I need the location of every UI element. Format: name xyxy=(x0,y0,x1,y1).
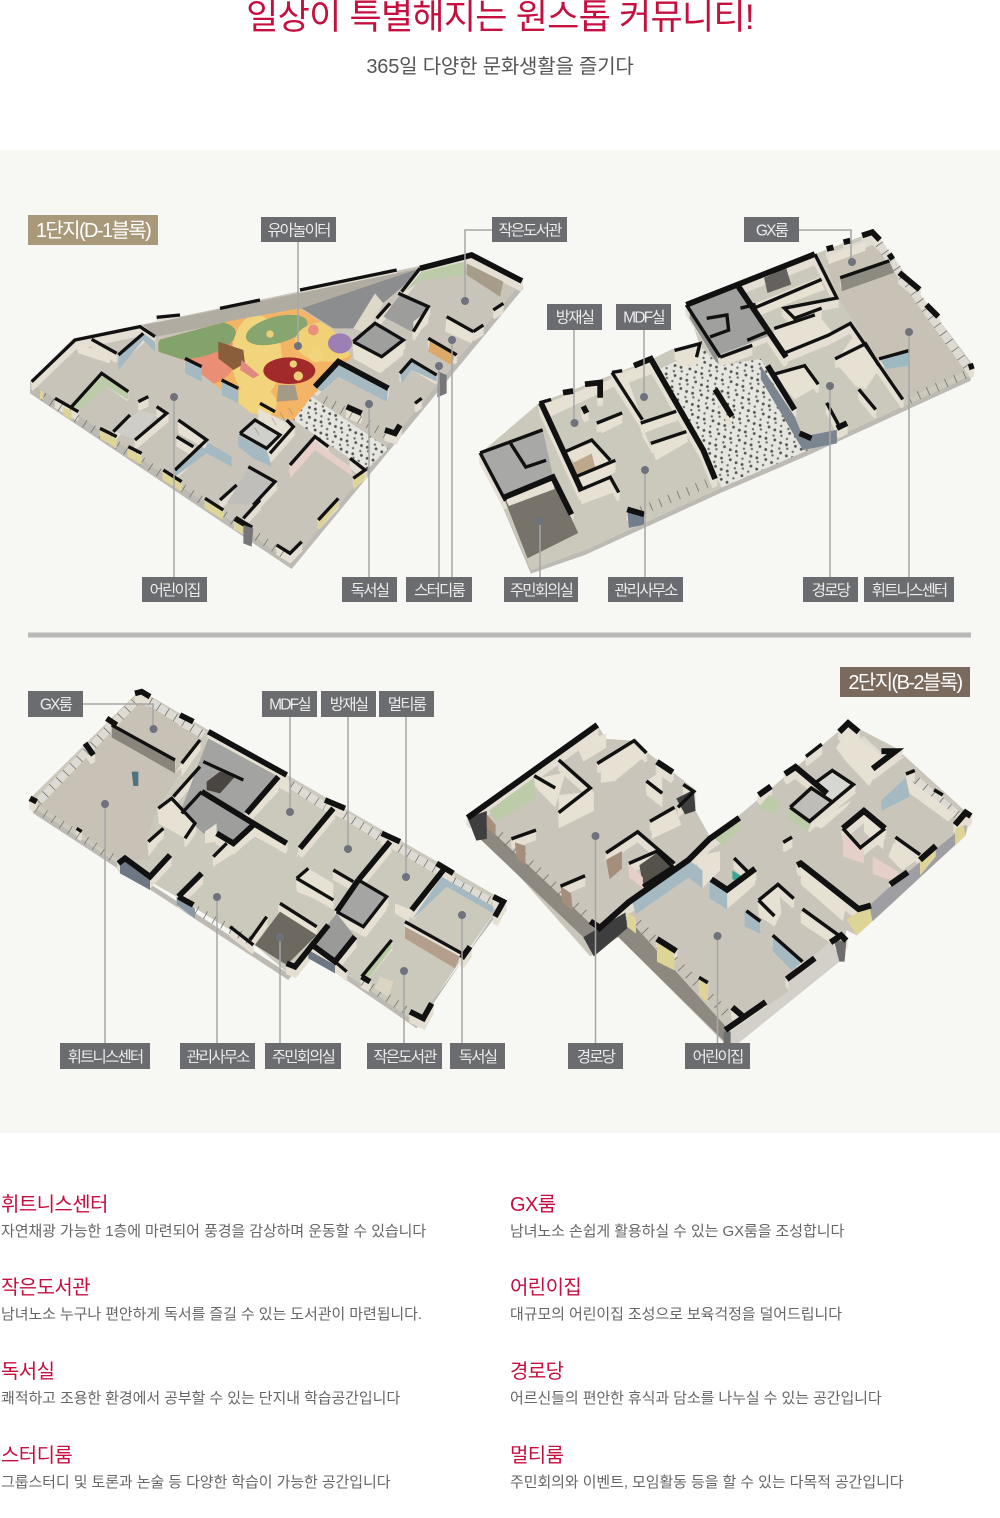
callout: 관리사무소 (2단지): 관리사무소 xyxy=(186,1048,250,1066)
text block: 작은도서관 xyxy=(1,1276,422,1323)
playground xyxy=(154,307,358,422)
black walls xyxy=(480,232,974,514)
callout: 어린이집 (2단지) xyxy=(685,932,750,1069)
text block: 멀티룸 xyxy=(510,1444,904,1491)
stone wall xyxy=(143,268,420,337)
tag: complex 1: 1단지(D-1블록) xyxy=(36,219,151,242)
mechanical rooms xyxy=(686,285,771,356)
meeting room xyxy=(504,477,578,558)
callout: MDF실 (2단지): MDF실 xyxy=(269,696,310,714)
tag: complex 2: 2단지(B-2블록) xyxy=(848,671,963,694)
text block: GX룸 xyxy=(510,1194,844,1240)
tag: complex 1 xyxy=(28,215,158,245)
callout: 방재실 (2단지): 방재실 xyxy=(330,696,368,714)
callout: GX룸 xyxy=(744,217,856,266)
callout: 어린이집 xyxy=(142,393,207,602)
text block: 스터디룸: 그룹스터디 및 토론과 논술 등 다양한 학습이 가능한 공간입니다 xyxy=(1,1474,390,1491)
text block: 독서실: 쾌적하고 조용한 환경에서 공부할 수 있는 단지내 학습공간입니다 xyxy=(1,1390,400,1407)
callout: 작은도서관: 작은도서관 xyxy=(498,222,562,240)
callout: 독서실 (2단지) xyxy=(450,911,505,1069)
text block: GX룸: 남녀노소 손쉽게 활용하실 수 있는 GX룸을 조성합니다 xyxy=(510,1223,844,1240)
text block: 멀티룸: 멀티룸 xyxy=(510,1444,563,1466)
callout: 작은도서관 (2단지) xyxy=(367,967,442,1069)
text block: 작은도서관: 작은도서관 xyxy=(1,1276,90,1298)
panel: floor plans xyxy=(0,150,1000,1133)
floor plan: complex 1 left block with playground xyxy=(30,255,523,569)
floor plan: complex 1 right block xyxy=(480,232,974,574)
window mullions xyxy=(43,397,390,558)
glass railings xyxy=(37,702,492,1013)
text block: 경로당: 어르신들의 편안한 휴식과 담소를 나누실 수 있는 공간입니다 xyxy=(510,1390,882,1407)
pillars xyxy=(40,390,365,538)
callout: 멀티룸 xyxy=(379,691,434,881)
callout: 휘트니스센터 (2단지) xyxy=(60,800,150,1069)
text block: 경로당 xyxy=(510,1360,882,1407)
callout: 경로당 xyxy=(803,382,858,602)
text block: 멀티룸: 주민회의와 이벤트, 모임활동 등을 할 수 있는 다목적 공간입니다 xyxy=(510,1474,904,1491)
grey court xyxy=(302,268,420,328)
black walls xyxy=(30,692,503,1018)
restroom core xyxy=(180,738,278,813)
white rooms xyxy=(505,242,879,506)
callout: 주민회의실 (2단지): 주민회의실 xyxy=(272,1048,335,1066)
floor plan: complex 2 right block xyxy=(468,723,971,1049)
text block: 스터디룸 xyxy=(1,1444,390,1491)
callout: 방재실: 방재실 xyxy=(556,308,594,326)
plaza xyxy=(659,349,808,487)
text block: 독서실: 독서실 xyxy=(1,1360,54,1382)
tag: complex 2 xyxy=(840,667,970,697)
callout: 독서실 (2단지): 독서실 xyxy=(459,1048,497,1066)
callout: GX룸: GX룸 xyxy=(756,222,789,240)
dark partition xyxy=(112,725,175,773)
callout: 경로당 (2단지): 경로당 xyxy=(577,1048,616,1066)
deck strip xyxy=(478,825,731,1044)
callout: 작은도서관 (2단지): 작은도서관 xyxy=(373,1048,437,1066)
black walls xyxy=(32,255,522,553)
colored walls xyxy=(487,778,909,1002)
reading room xyxy=(412,877,493,920)
callout: 휘트니스센터: 휘트니스센터 xyxy=(872,582,947,600)
callout: 주민회의실 xyxy=(504,517,578,602)
dark stone xyxy=(468,811,487,841)
callout: 주민회의실 (2단지) xyxy=(265,933,341,1069)
text block: 스터디룸: 스터디룸 xyxy=(1,1444,72,1466)
callout: 유아놀이터: 유아놀이터 xyxy=(267,222,330,240)
callout: 관리사무소: 관리사무소 xyxy=(614,582,678,600)
callout: 주민회의실: 주민회의실 xyxy=(510,582,573,600)
text block: 어린이집: 대규모의 어린이집 조성으로 보육걱정을 덜어드립니다 xyxy=(510,1306,842,1323)
callout: 스터디룸 xyxy=(406,336,472,602)
callout: 어린이집: 어린이집 xyxy=(150,582,200,600)
text block: 휘트니스센터: 자연채광 가능한 1층에 마련되어 풍경을 감상하며 운동할 수 있습니다 xyxy=(1,1223,426,1240)
text block: 독서실 xyxy=(1,1360,400,1407)
callout: 휘트니스센터 xyxy=(864,328,954,602)
text block: GX룸: GX룸 xyxy=(510,1194,556,1216)
callout: MDF실 (2단지) xyxy=(262,691,317,816)
callout: 방재실 xyxy=(547,304,602,427)
callout: 휘트니스센터 (2단지): 휘트니스센터 xyxy=(68,1048,143,1066)
text block: 경로당: 경로당 xyxy=(510,1360,563,1382)
callout: 경로당: 경로당 xyxy=(812,582,851,600)
callout: GX룸 (2단지): GX룸 xyxy=(40,696,73,714)
callout: 유아놀이터 xyxy=(261,217,336,350)
fitness floor xyxy=(37,697,203,860)
text block: 어린이집 xyxy=(510,1276,842,1323)
callout: 방재실 (2단지) xyxy=(321,691,376,853)
callout: 경로당 (2단지) xyxy=(568,832,623,1069)
glass railings xyxy=(632,241,970,514)
callout: 작은도서관 xyxy=(461,217,567,305)
fitness floor xyxy=(825,237,970,399)
callout: 독서실: 독서실 xyxy=(351,582,389,600)
stone wall xyxy=(727,941,839,1049)
text block: 휘트니스센터: 휘트니스센터 xyxy=(1,1194,108,1216)
callout: GX룸 (2단지) xyxy=(28,691,158,733)
callout: 스터디룸: 스터디룸 xyxy=(414,582,465,600)
plaza xyxy=(293,397,388,470)
text block: 작은도서관: 남녀노소 누구나 편안하게 독서를 즐길 수 있는 도서관이 마련됩니다. xyxy=(1,1306,422,1323)
glass railings xyxy=(860,739,959,816)
rooms xyxy=(73,262,503,505)
callout: 독서실 xyxy=(342,400,397,602)
window mullions xyxy=(492,828,727,1014)
right base xyxy=(846,906,873,935)
black walls xyxy=(468,723,971,1030)
floor plan: complex 2 left block xyxy=(28,690,503,1028)
text block: 어린이집: 어린이집 xyxy=(510,1276,581,1298)
callout: 관리사무소 xyxy=(608,466,683,602)
text block: 휘트니스센터 xyxy=(1,1194,426,1240)
callout: MDF실: MDF실 xyxy=(623,308,664,326)
callout: 멀티룸: 멀티룸 xyxy=(388,696,427,714)
callout: 관리사무소 (2단지) xyxy=(180,893,255,1069)
subtitle: 365일 다양한 문화생활을 즐기다 xyxy=(366,56,634,78)
meeting room xyxy=(255,912,317,965)
dark band xyxy=(840,261,894,291)
callout: MDF실 xyxy=(616,304,671,401)
white walls xyxy=(148,742,412,938)
left restroom xyxy=(482,430,553,498)
white rooms xyxy=(534,730,955,944)
stair core columns xyxy=(243,372,447,547)
callout: 어린이집 (2단지): 어린이집 xyxy=(693,1048,743,1066)
